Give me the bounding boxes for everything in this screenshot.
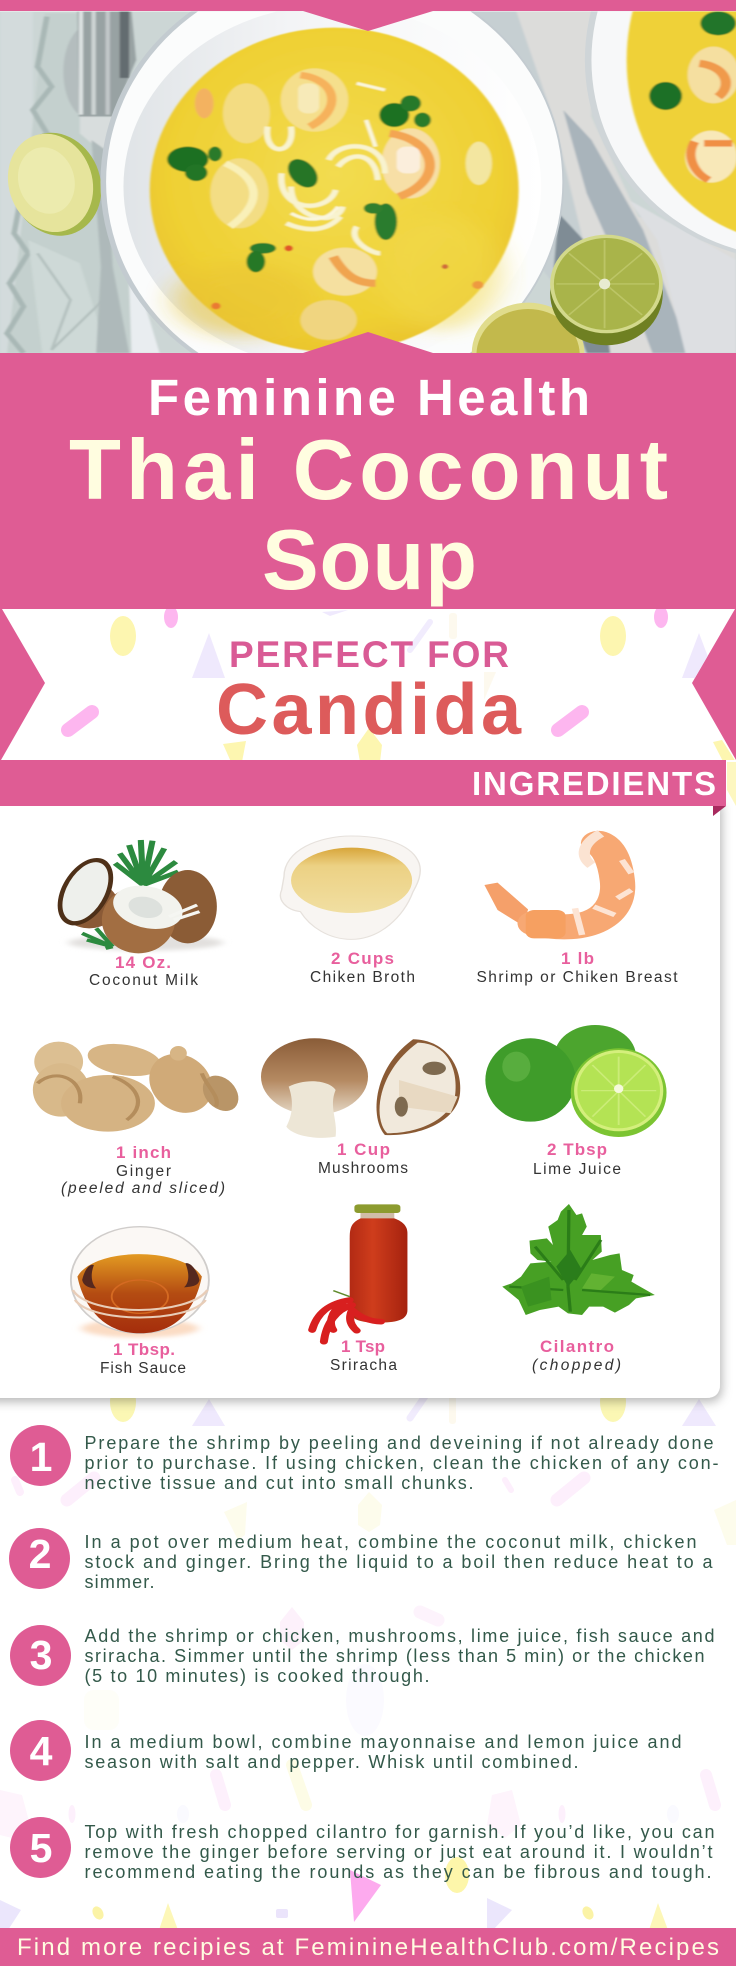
step 2 text: stock and ginger. Bring the liquid to a boil then reduce heat to a [84,1552,713,1572]
step 2 text [84,1532,713,1592]
step 5 [10,1817,714,1882]
text: 1 Tsp Sriracha: 1 Tsp [341,1337,385,1356]
step 4 [10,1720,682,1781]
text: 2 Tbsp Lime Juice [533,1140,621,1178]
icon: mushrooms [261,1038,460,1138]
icon: fish sauce bowl [71,1227,209,1338]
text: Cilantro chopped: Cilantro [540,1337,614,1356]
text: 14 Oz. Coconut Milk [89,953,198,989]
top pink bar with notch [0,0,736,31]
number badge 1 [10,1425,71,1486]
step 3 text: sriracha. Simmer until the shrimp (less than 5 min) or the chicken [84,1646,704,1666]
icon: ginger [33,1039,245,1132]
text: Cilantro chopped: (chopped) [532,1357,621,1374]
number badge 4 [10,1720,71,1781]
text: 1 Cup Mushrooms [318,1140,408,1177]
number badge 5 [10,1817,71,1878]
number badge 3: 3 [30,1632,52,1678]
step 2 [9,1528,713,1592]
heading: Thai Coconut: Thai Coconut [69,423,668,518]
footer text: Find more recipies at FeminineHealthClub.com/Recipes [17,1934,719,1961]
text: 1 inch Ginger peeled and sliced: (peeled and sliced) [61,1180,225,1197]
text: 1 Tsp Sriracha [330,1337,397,1374]
step 5 text: Top with fresh chopped cilantro for garnish. If you’d like, you can [84,1822,714,1842]
icon: coconut milk [47,840,223,953]
photo: fork and knife [63,11,160,353]
cilantro [379,103,409,127]
step 2 text: simmer. [84,1572,154,1592]
text: 1 lb Shrimp or Chiken Breast: Shrimp or Chiken Breast [476,969,678,986]
yellow confetti beside ribbon [727,762,736,806]
number badge 3 [10,1625,71,1686]
heading: Feminine Health: Feminine Health [148,369,590,426]
step 1 text: prior to purchase. If using chicken, clean the chicken of any con- [84,1453,718,1473]
text: 2 Tbsp Lime Juice: Lime Juice [533,1161,621,1178]
panel: ingredients card [0,800,720,1398]
step 1 text [84,1433,718,1493]
text: 14 Oz. Coconut Milk: 14 Oz. [115,953,171,972]
photo: lime half bottom [472,302,584,353]
text: 1 lb Shrimp or Chiken Breast: 1 lb [561,949,594,968]
step 5 text: recommend eating the rounds as they can be fibrous and tough. [84,1862,712,1882]
text: 1 inch Ginger peeled and sliced [61,1143,225,1197]
heading: Soup: Soup [262,513,477,608]
text: 1 Tbsp. Fish Sauce: Fish Sauce [100,1360,186,1377]
text: 1 lb Shrimp or Chiken Breast [476,949,678,986]
number badge 4: 4 [30,1728,53,1774]
step 1 text: nective tissue and cut into small chunks. [84,1473,473,1493]
background confetti: steps area [0,1382,736,1930]
text: 14 Oz. Coconut Milk: Coconut Milk [89,972,198,989]
ribbon fold [713,806,726,816]
banner text: Candida: Candida [216,670,522,750]
step 5 text: remove the ginger before serving or just eat around it. I wouldn’t [84,1842,712,1862]
ingredients ribbon [0,760,726,816]
text: 2 Tbsp Lime Juice: 2 Tbsp [547,1140,607,1159]
step 3 text [84,1626,714,1686]
number badge 1: 1 [30,1434,52,1480]
photo: half lime left [8,132,101,236]
step 2 text: In a pot over medium heat, combine the coconut milk, chicken [84,1532,697,1552]
text: 2 Cups Chiken Broth: 2 Cups [331,949,394,968]
photo: crumpled cloth left [4,16,100,353]
photo: lime slice right [550,235,663,345]
hero photo of soup [0,11,736,353]
banner confetti [68,606,736,775]
step 3 text: Add the shrimp or chicken, mushrooms, lime juice, fish sauce and [84,1626,714,1646]
noodles [267,127,385,253]
text: Cilantro chopped [532,1337,621,1374]
number badge 2 [9,1528,70,1589]
step 3 text: (5 to 10 minutes) is cooked through. [84,1666,430,1686]
step 1 [10,1425,718,1493]
number badge 2: 2 [29,1531,51,1577]
icon: shrimp [484,833,631,938]
icon: chicken broth bowl [280,836,420,939]
icon: sriracha jar and chillies [312,1204,407,1342]
footer bar [0,1928,736,1966]
step 3 [10,1625,714,1686]
ribbon banner: perfect for candida [1,609,736,760]
photo: soup [150,28,519,352]
step 4 text: season with salt and pepper. Whisk until combined. [84,1752,578,1772]
text: 1 Cup Mushrooms: 1 Cup [337,1140,390,1159]
number badge 5: 5 [30,1825,52,1871]
heading: INGREDIENTS: INGREDIENTS [472,765,716,802]
text: 1 Tbsp. Fish Sauce [100,1340,186,1377]
pink title panel [0,332,736,760]
text: 1 Cup Mushrooms: Mushrooms [318,1160,408,1177]
text: 1 Tbsp. Fish Sauce: 1 Tbsp. [113,1340,175,1359]
photo: second bowl [585,0,736,260]
icon: limes [485,1025,667,1137]
text: 2 Cups Chiken Broth: Chiken Broth [310,969,415,986]
shrimps [281,68,348,132]
step 4 text [84,1732,682,1772]
text: 1 inch Ginger peeled and sliced: Ginger [116,1163,171,1180]
text: 1 Tsp Sriracha: Sriracha [330,1357,397,1374]
step 1 text: Prepare the shrimp by peeling and deveining if not already done [84,1433,713,1453]
photo: right table and towel [517,12,736,353]
text: 1 inch Ginger peeled and sliced: 1 inch [116,1143,171,1162]
step 4 text: In a medium bowl, combine mayonnaise and lemon juice and [84,1732,682,1752]
photo: main bowl [100,11,563,353]
text: 2 Cups Chiken Broth [310,949,415,986]
banner text: PERFECT FOR: PERFECT FOR [229,634,509,675]
icon: cilantro [502,1204,655,1315]
step 5 text [84,1822,714,1882]
